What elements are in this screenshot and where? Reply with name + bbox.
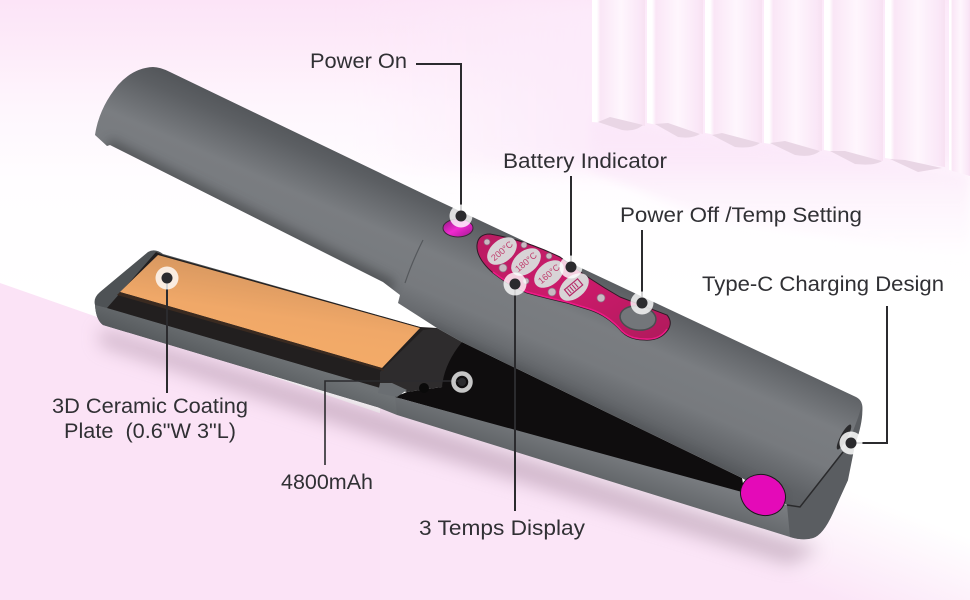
plate lower edge	[117, 292, 384, 371]
callout: 3 Temps Display	[419, 272, 586, 540]
callout: Battery Indicator	[503, 150, 667, 278]
background: pink wash behind columns	[350, 0, 970, 170]
upper arm	[95, 67, 862, 507]
background: lower pink surface left	[0, 283, 400, 600]
callout: Power Off / Temp Setting	[620, 204, 862, 314]
power on button	[443, 219, 473, 237]
background: lower pink surface right	[380, 400, 970, 600]
end seam	[787, 452, 843, 507]
200 C label	[482, 232, 522, 270]
200 C label: 200°C	[489, 239, 515, 263]
callout: 3 Temps Display: 3 Temps Display	[419, 517, 586, 540]
lower arm body	[395, 397, 848, 539]
hinge dark area	[380, 328, 462, 392]
ceramic plate	[120, 255, 420, 368]
power off button	[619, 304, 657, 332]
callout: Power Off / Temp Setting: Power Off /Temp Setting	[620, 204, 862, 227]
callout: Power On	[310, 50, 472, 228]
magenta panel	[477, 234, 670, 340]
shadow under straightener	[100, 328, 820, 565]
callout: 4800mAh	[281, 374, 470, 494]
background: pink glass columns	[590, 0, 970, 260]
180 C label	[506, 243, 546, 281]
hair straightener	[95, 67, 862, 539]
battery label	[554, 268, 594, 306]
callout: 3D Ceramic Coating Plate: 3D Ceramic Coating	[52, 395, 248, 418]
hinge clip	[378, 383, 407, 397]
callout: 4800mAh: 4800mAh	[281, 471, 373, 494]
160 C label	[529, 255, 569, 293]
callout: 3D Ceramic Coating Plate	[52, 266, 248, 443]
control panel	[477, 232, 670, 340]
upper arm underside shade	[105, 150, 780, 505]
160 C label: 160°C	[536, 262, 562, 286]
callout: Battery Indicator: Battery Indicator	[503, 150, 667, 173]
hinge screw hole	[419, 383, 429, 393]
end face	[787, 405, 862, 539]
callout: Power On: Power On	[310, 50, 407, 73]
callout: 3D Ceramic Coating Plate: Plate (0.6"W 3"L)	[64, 420, 236, 443]
lower arm outer rim	[95, 305, 397, 415]
panel lower highlight	[493, 272, 667, 339]
black gap between arms	[395, 342, 745, 495]
callout: Type-C Charging Design	[702, 273, 944, 454]
magenta end cap	[734, 467, 792, 523]
collar seam	[405, 240, 423, 283]
callout: Type-C Charging Design: Type-C Charging Design	[702, 273, 944, 296]
lower arm tray outer edge	[95, 250, 420, 407]
180 C label: 180°C	[513, 250, 539, 274]
gems	[484, 239, 605, 302]
tray black frame	[107, 252, 437, 392]
type-c port	[834, 423, 854, 451]
